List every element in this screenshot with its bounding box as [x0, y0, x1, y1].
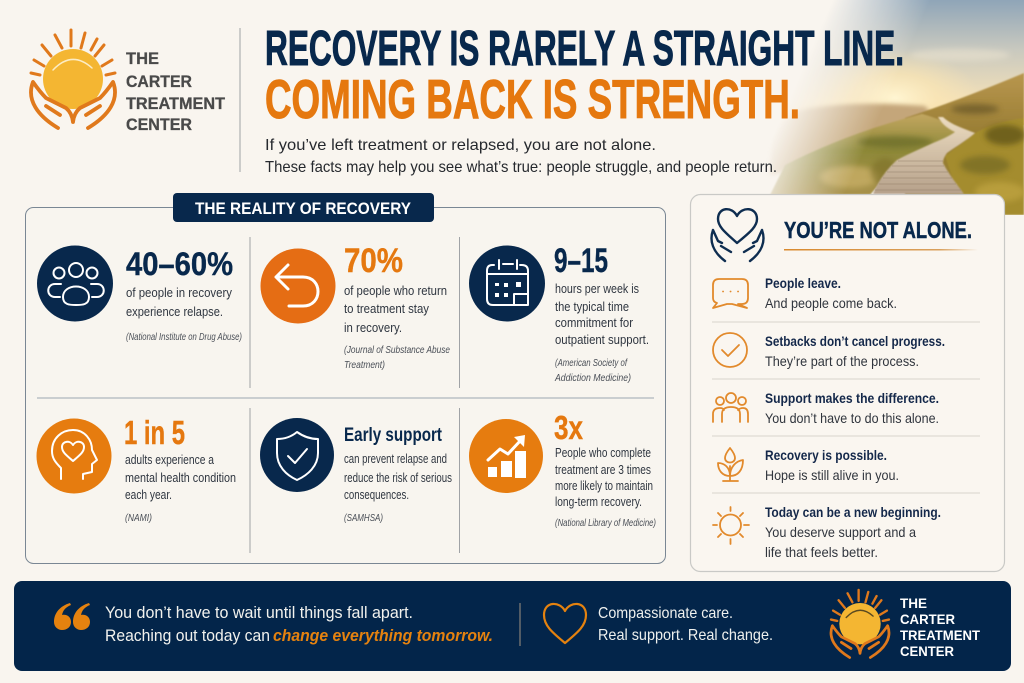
intro text — [265, 137, 777, 176]
item: setbacks — [713, 333, 945, 369]
footer banner — [14, 581, 1011, 671]
icon: shield with check — [260, 418, 334, 492]
item: support — [713, 390, 939, 426]
icon: check circle — [713, 333, 747, 367]
item: people leave: People leave. — [765, 275, 841, 291]
stat: 9-15: 9–15 — [554, 242, 608, 280]
logo wordmark: CENTER — [126, 115, 192, 134]
item: recovery possible: Recovery is possible. — [765, 447, 887, 463]
stat: 3x: People who complete — [555, 445, 651, 460]
item: new beginning: life that feels better. — [765, 544, 878, 560]
stat: early support: reduce the risk of serious — [344, 470, 452, 485]
item: support: Support makes the difference. — [765, 390, 939, 406]
icon: quotation mark — [54, 603, 90, 630]
stat: 70%: Treatment) — [344, 360, 385, 371]
stat: 70%: of people who return — [344, 283, 447, 298]
stat: 1 in 5: (NAMI) — [125, 513, 152, 524]
tagline: Compassionate care. — [598, 605, 733, 622]
quote text: You don’t have to wait until things fall apart. — [105, 604, 413, 622]
stat: 3x: (National Library of Medicine) — [555, 518, 656, 529]
item: support: You don’t have to do this alone. — [765, 410, 939, 426]
footer logo — [831, 590, 981, 659]
section heading — [173, 193, 434, 222]
logo wordmark: TREATMENT — [126, 94, 226, 113]
stat: 40-60%: of people in recovery — [126, 285, 232, 300]
stat: 40-60% — [37, 246, 242, 343]
intro text: If you’ve left treatment or relapsed, you are not alone. — [265, 137, 656, 154]
item: recovery possible — [718, 447, 899, 483]
item: people leave — [713, 275, 897, 311]
item: recovery possible: Hope is still alive in you. — [765, 467, 899, 483]
stat: 1 in 5: mental health condition — [125, 470, 236, 485]
stat: 9-15: the typical time — [555, 299, 629, 314]
stat: 1 in 5: each year. — [125, 487, 172, 502]
logo wordmark: THE — [126, 49, 159, 68]
stat: early support: can prevent relapse and — [344, 451, 447, 466]
stat: 9-15: outpatient support. — [555, 332, 649, 347]
panel: you're not alone — [690, 194, 1004, 572]
stat: 70%: 70% — [344, 242, 403, 280]
item: new beginning — [713, 504, 941, 560]
footer logo: CENTER — [900, 644, 954, 659]
stat: early support — [260, 418, 452, 524]
icon: heart outline — [544, 604, 586, 643]
icon: calendar — [469, 246, 545, 322]
tagline — [598, 605, 773, 644]
footer logo: TREATMENT — [900, 628, 981, 643]
heading: YOU’RE NOT ALONE. — [784, 217, 972, 243]
stat: 1 in 5 — [36, 414, 236, 524]
boardwalk — [873, 117, 975, 194]
stat: early support: (SAMHSA) — [344, 513, 383, 524]
logo wordmark — [126, 49, 226, 134]
stat: 1 in 5: adults experience a — [125, 452, 215, 467]
tagline: Real support. Real change. — [598, 627, 773, 644]
stat: 9-15: (American Society of — [555, 358, 628, 369]
stat: 40-60%: (National Institute on Drug Abuse) — [126, 332, 242, 343]
item: setbacks: Setbacks don’t cancel progress. — [765, 333, 945, 349]
stat: 9-15: commitment for — [555, 315, 634, 330]
stat: 9-15: hours per week is — [555, 281, 639, 296]
icon: group of people — [37, 246, 113, 322]
icon: chat bubble — [713, 279, 748, 308]
stat: 3x — [469, 409, 656, 529]
item: new beginning: Today can be a new beginning. — [765, 504, 941, 520]
hero photo: sunrise path through hills — [760, 0, 1024, 215]
icon: growth chart — [469, 419, 543, 493]
logo wordmark: CARTER — [126, 72, 192, 91]
stat: 40-60%: 40–60% — [126, 246, 233, 282]
icon: sun — [713, 507, 749, 544]
stat: 70%: (Journal of Substance Abuse — [344, 345, 450, 356]
icon: sun in hands — [31, 30, 115, 128]
stat: 3x: long-term recovery. — [555, 494, 642, 509]
stat: early support: Early support — [344, 424, 442, 446]
stat: early support: consequences. — [344, 487, 409, 502]
quote text: change everything tomorrow. — [273, 627, 493, 645]
stat: 9-15 — [469, 242, 649, 384]
stat: 40-60%: experience relapse. — [126, 304, 223, 319]
section heading: THE REALITY OF RECOVERY — [195, 199, 412, 218]
stat: 70% — [260, 242, 450, 371]
stat: 3x: treatment are 3 times — [555, 462, 651, 477]
stat: 3x: 3x — [554, 409, 584, 446]
icon: sprout — [718, 448, 743, 481]
icon: head with heart — [36, 418, 112, 494]
stat: 1 in 5: 1 in 5 — [124, 414, 185, 451]
footer logo: CARTER — [900, 612, 955, 627]
item: people leave: And people come back. — [765, 295, 897, 311]
footer logo: THE — [900, 596, 927, 611]
stat: 3x: more likely to maintain — [555, 478, 653, 493]
icon: return arrow — [260, 248, 336, 324]
quote text: Reaching out today can — [105, 627, 270, 645]
quote text — [105, 604, 493, 645]
item: setbacks: They’re part of the process. — [765, 353, 919, 369]
stat: 9-15: Addiction Medicine) — [554, 373, 631, 384]
headline — [265, 22, 904, 130]
stat: 70%: in recovery. — [344, 320, 402, 335]
stat: 70%: to treatment stay — [344, 301, 429, 316]
logo: The Carter Treatment Center — [31, 30, 226, 134]
intro text: These facts may help you see what’s true: people struggle, and people return. — [265, 159, 777, 176]
icon: people — [713, 393, 748, 422]
item: new beginning: You deserve support and a — [765, 524, 916, 540]
boardwalk planks — [875, 161, 961, 190]
icon: heart in hands — [712, 209, 764, 261]
panel: the reality of recovery — [26, 193, 666, 564]
